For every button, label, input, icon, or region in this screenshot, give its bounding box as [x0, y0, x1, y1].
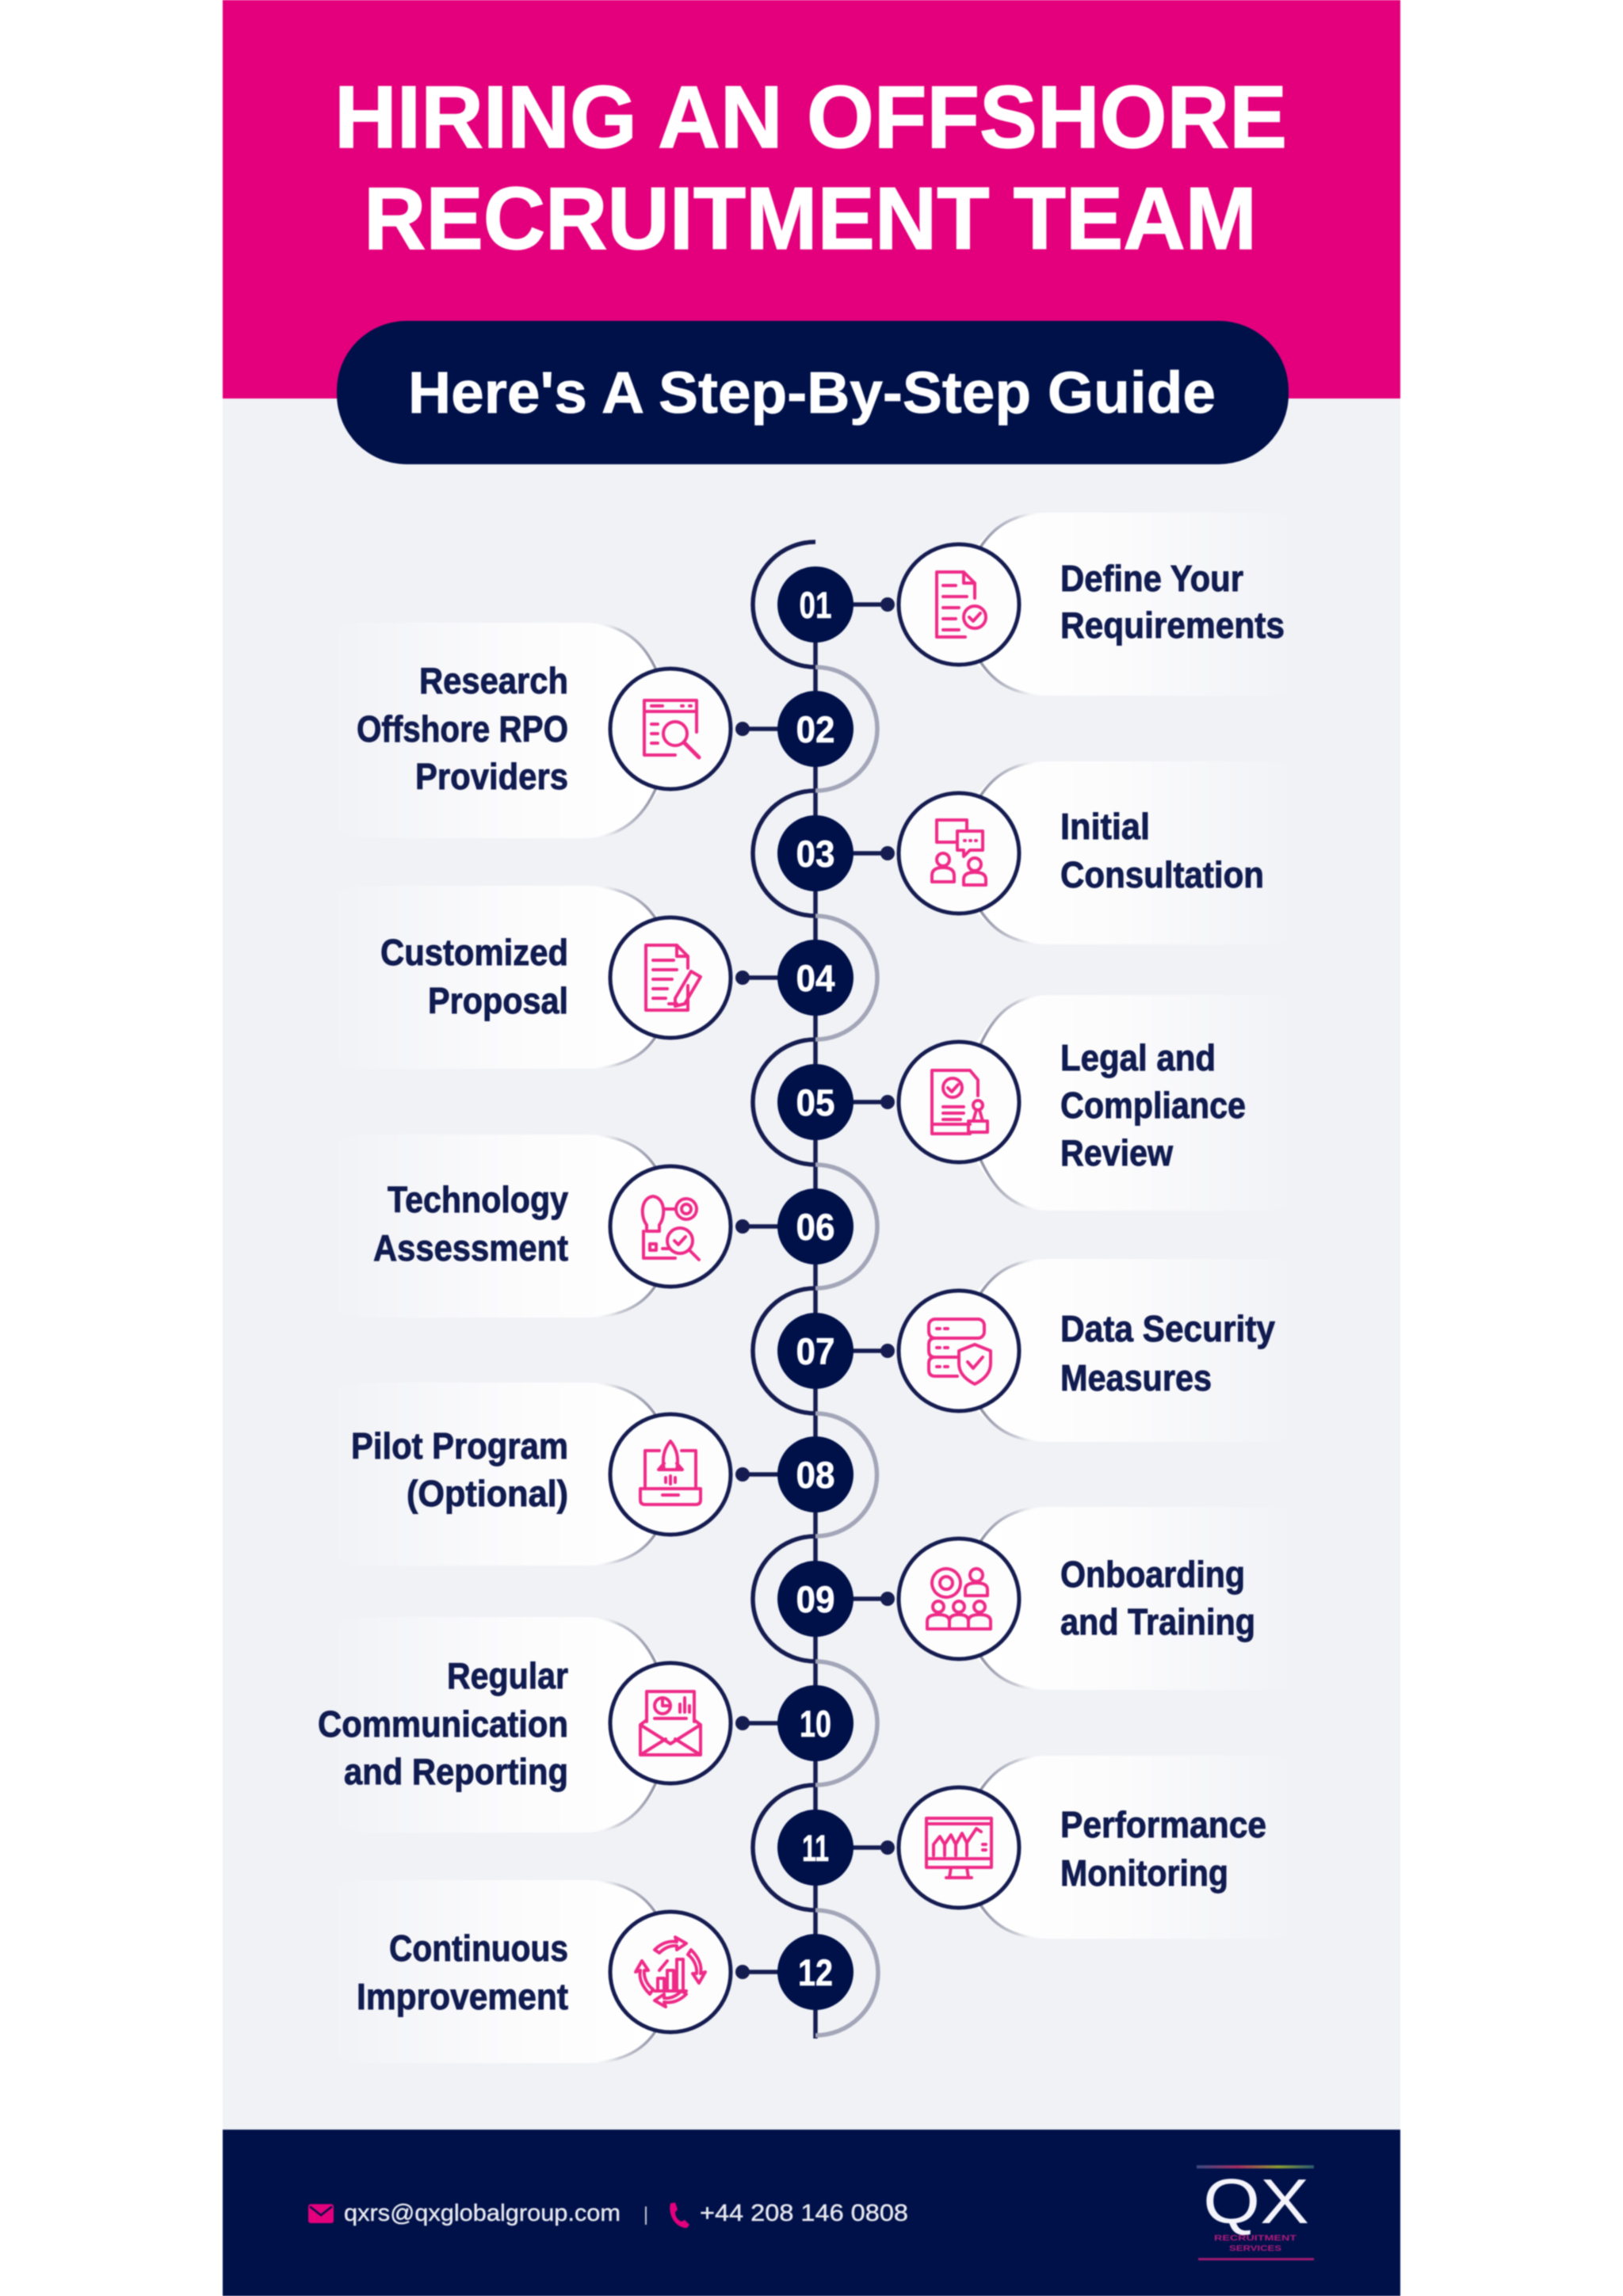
number badge 08: 08 — [796, 1454, 835, 1496]
icon: monitor with rising chart — [926, 1818, 991, 1878]
arc 12 — [815, 1910, 878, 2035]
step 02 — [301, 623, 877, 838]
callout bubble 05 — [975, 995, 1331, 1211]
icon: technology bulb, gear and magnifier — [643, 1196, 699, 1260]
icon ring 01 — [899, 544, 1019, 665]
callout bubble 02 — [301, 623, 662, 838]
arc 02 — [815, 667, 877, 791]
connector 07 — [815, 1344, 895, 1358]
label 05: Review — [1060, 1132, 1173, 1173]
connector 04 — [735, 971, 815, 985]
number badge 09 — [777, 1561, 854, 1637]
connector 09 — [815, 1592, 895, 1606]
number badge 07 — [777, 1313, 854, 1389]
arc 11 — [753, 1785, 815, 1910]
number badge 09: 09 — [796, 1578, 835, 1620]
label 02: Offshore RPO — [357, 708, 568, 749]
contact divider — [645, 2206, 647, 2225]
connector 02 — [735, 722, 815, 736]
number badge 07: 07 — [796, 1330, 835, 1372]
panel: light grey body background — [223, 0, 1400, 2296]
arc 05 — [753, 1039, 815, 1165]
step 05 — [753, 995, 1331, 1211]
icon: consultation — [932, 820, 986, 885]
icon ring 06 — [610, 1166, 731, 1287]
number badge 10: 10 — [800, 1703, 831, 1745]
arc 07 — [753, 1288, 815, 1413]
label 12 — [357, 1928, 568, 2017]
step 04 — [301, 886, 877, 1069]
icon ring 10 — [610, 1663, 731, 1783]
callout bubble 01 — [975, 513, 1331, 696]
label 08: Pilot Program — [351, 1425, 568, 1466]
label 10: and Reporting — [344, 1751, 568, 1792]
icon ring 05 — [899, 1042, 1019, 1162]
label 04: Proposal — [428, 980, 568, 1021]
panel: pink header band — [223, 0, 1400, 399]
icon ring 07 — [899, 1291, 1019, 1411]
label 11 — [1060, 1804, 1266, 1894]
label 01 — [1060, 558, 1285, 646]
number badge 06: 06 — [796, 1206, 835, 1248]
label 06 — [373, 1179, 568, 1268]
number badge 05 — [777, 1064, 854, 1140]
label 01: Define Your — [1060, 558, 1243, 599]
label 07: Data Security — [1060, 1308, 1275, 1349]
number badge 11 — [777, 1810, 854, 1886]
arc 06 — [815, 1165, 877, 1288]
label 04 — [380, 932, 568, 1021]
arc 08 — [815, 1413, 876, 1536]
icon: legal document with stamp — [932, 1070, 987, 1134]
connector 05 — [815, 1095, 895, 1109]
label 11: Performance — [1060, 1804, 1266, 1845]
number badge 11: 11 — [802, 1827, 829, 1869]
number badge 06 — [777, 1188, 854, 1264]
icon ring 12 — [610, 1912, 731, 2032]
number badge 10 — [777, 1685, 854, 1761]
number badge 12 — [777, 1934, 854, 2010]
logo: RECRUITMENT — [1214, 2234, 1296, 2243]
icon: servers and shield — [929, 1319, 991, 1384]
label 11: Monitoring — [1060, 1852, 1228, 1894]
label 08 — [351, 1425, 568, 1514]
icon: laptop with rocket — [640, 1441, 701, 1505]
connector 06 — [735, 1219, 815, 1234]
label 03 — [1060, 806, 1264, 895]
number badge 01: 01 — [799, 584, 832, 626]
icon: onboarding gear and team — [927, 1569, 991, 1629]
number badge 04: 04 — [796, 957, 835, 999]
contact email: qxrs@qxglobalgroup.com — [344, 2200, 621, 2226]
icon ring 03 — [899, 793, 1019, 913]
callout bubble 07 — [975, 1259, 1331, 1442]
icon ring 09 — [899, 1539, 1019, 1659]
arc 09 — [753, 1536, 815, 1661]
logo: QX — [1203, 2166, 1309, 2237]
step 12 — [301, 1880, 878, 2063]
label 02: Research — [419, 660, 568, 701]
label 09: and Training — [1060, 1601, 1255, 1642]
label 10 — [318, 1655, 568, 1792]
number badge 02: 02 — [796, 708, 835, 750]
connector 03 — [815, 846, 895, 860]
label 03: Consultation — [1060, 854, 1264, 895]
connector 12 — [735, 1965, 815, 1979]
label 08: (Optional) — [407, 1473, 568, 1514]
number badge 03: 03 — [796, 833, 835, 875]
icon ring 08 — [610, 1414, 731, 1535]
icon: document checklist — [937, 572, 986, 637]
step 01 — [753, 513, 1331, 696]
subtitle pill — [337, 321, 1289, 464]
label 03: Initial — [1060, 806, 1150, 847]
label 01: Requirements — [1060, 605, 1285, 646]
callout bubble 10 — [301, 1617, 662, 1833]
icon: proposal document and pen — [646, 945, 701, 1010]
step 03 — [753, 761, 1331, 944]
timeline spine — [813, 605, 818, 2039]
label 10: Regular — [447, 1655, 568, 1696]
label 07: Measures — [1060, 1357, 1212, 1398]
callout bubble 04 — [301, 886, 662, 1069]
label 06: Assessment — [373, 1227, 568, 1268]
icon ring 04 — [610, 917, 731, 1038]
arc 01 — [753, 542, 815, 667]
number badge 05: 05 — [796, 1081, 835, 1123]
icon: browser magnifier — [644, 700, 699, 757]
label 05: Compliance — [1060, 1085, 1246, 1126]
callout bubble 12 — [301, 1880, 662, 2063]
step 07 — [753, 1259, 1331, 1442]
callout bubble 03 — [975, 761, 1331, 944]
step 11 — [753, 1756, 1331, 1939]
number badge 02 — [777, 691, 854, 767]
label 02 — [357, 660, 568, 797]
step 06 — [301, 1135, 877, 1318]
title — [334, 68, 1287, 268]
callout bubble 09 — [975, 1507, 1331, 1690]
callout bubble 06 — [301, 1135, 662, 1318]
icon: envelope — [308, 2204, 334, 2223]
connector 08 — [735, 1467, 815, 1482]
icon: improvement cycle — [636, 1937, 705, 2007]
subtitle pill: Here's A Step-By-Step Guide — [408, 360, 1216, 425]
icon: phone — [670, 2203, 689, 2228]
logo — [1197, 2165, 1314, 2260]
step 10 — [301, 1617, 877, 1833]
number badge 04 — [777, 940, 854, 1016]
arc 03 — [753, 791, 815, 916]
arc 04 — [815, 916, 877, 1039]
contact phone: +44 208 146 0808 — [700, 2200, 908, 2226]
label 09: Onboarding — [1060, 1554, 1245, 1595]
label 09 — [1060, 1554, 1255, 1642]
label 12: Improvement — [357, 1976, 568, 2017]
connector 11 — [815, 1840, 895, 1855]
title: RECRUITMENT TEAM — [364, 170, 1257, 268]
number badge 03 — [777, 815, 854, 891]
label 12: Continuous — [389, 1928, 568, 1969]
number badge 08 — [777, 1436, 854, 1512]
icon ring 02 — [610, 669, 731, 789]
panel: navy footer — [223, 2130, 1400, 2296]
number badge 12: 12 — [798, 1951, 833, 1993]
title: HIRING AN OFFSHORE — [334, 68, 1287, 166]
icon: envelope with report — [640, 1691, 701, 1755]
label 04: Customized — [380, 932, 568, 973]
callout bubble 11 — [975, 1756, 1331, 1939]
icon ring 11 — [899, 1787, 1019, 1908]
label 05: Legal and — [1060, 1037, 1216, 1078]
arc 10 — [815, 1661, 877, 1785]
label 07 — [1060, 1308, 1275, 1398]
connector 10 — [735, 1716, 815, 1730]
connector 01 — [815, 597, 895, 612]
step 08 — [301, 1383, 876, 1566]
label 06: Technology — [388, 1179, 568, 1220]
label 10: Communication — [318, 1703, 568, 1745]
label 05 — [1060, 1037, 1246, 1173]
logo: SERVICES — [1229, 2245, 1281, 2253]
label 02: Providers — [415, 756, 568, 797]
number badge 01 — [777, 566, 854, 643]
callout bubble 08 — [301, 1383, 662, 1566]
step 09 — [753, 1507, 1331, 1690]
